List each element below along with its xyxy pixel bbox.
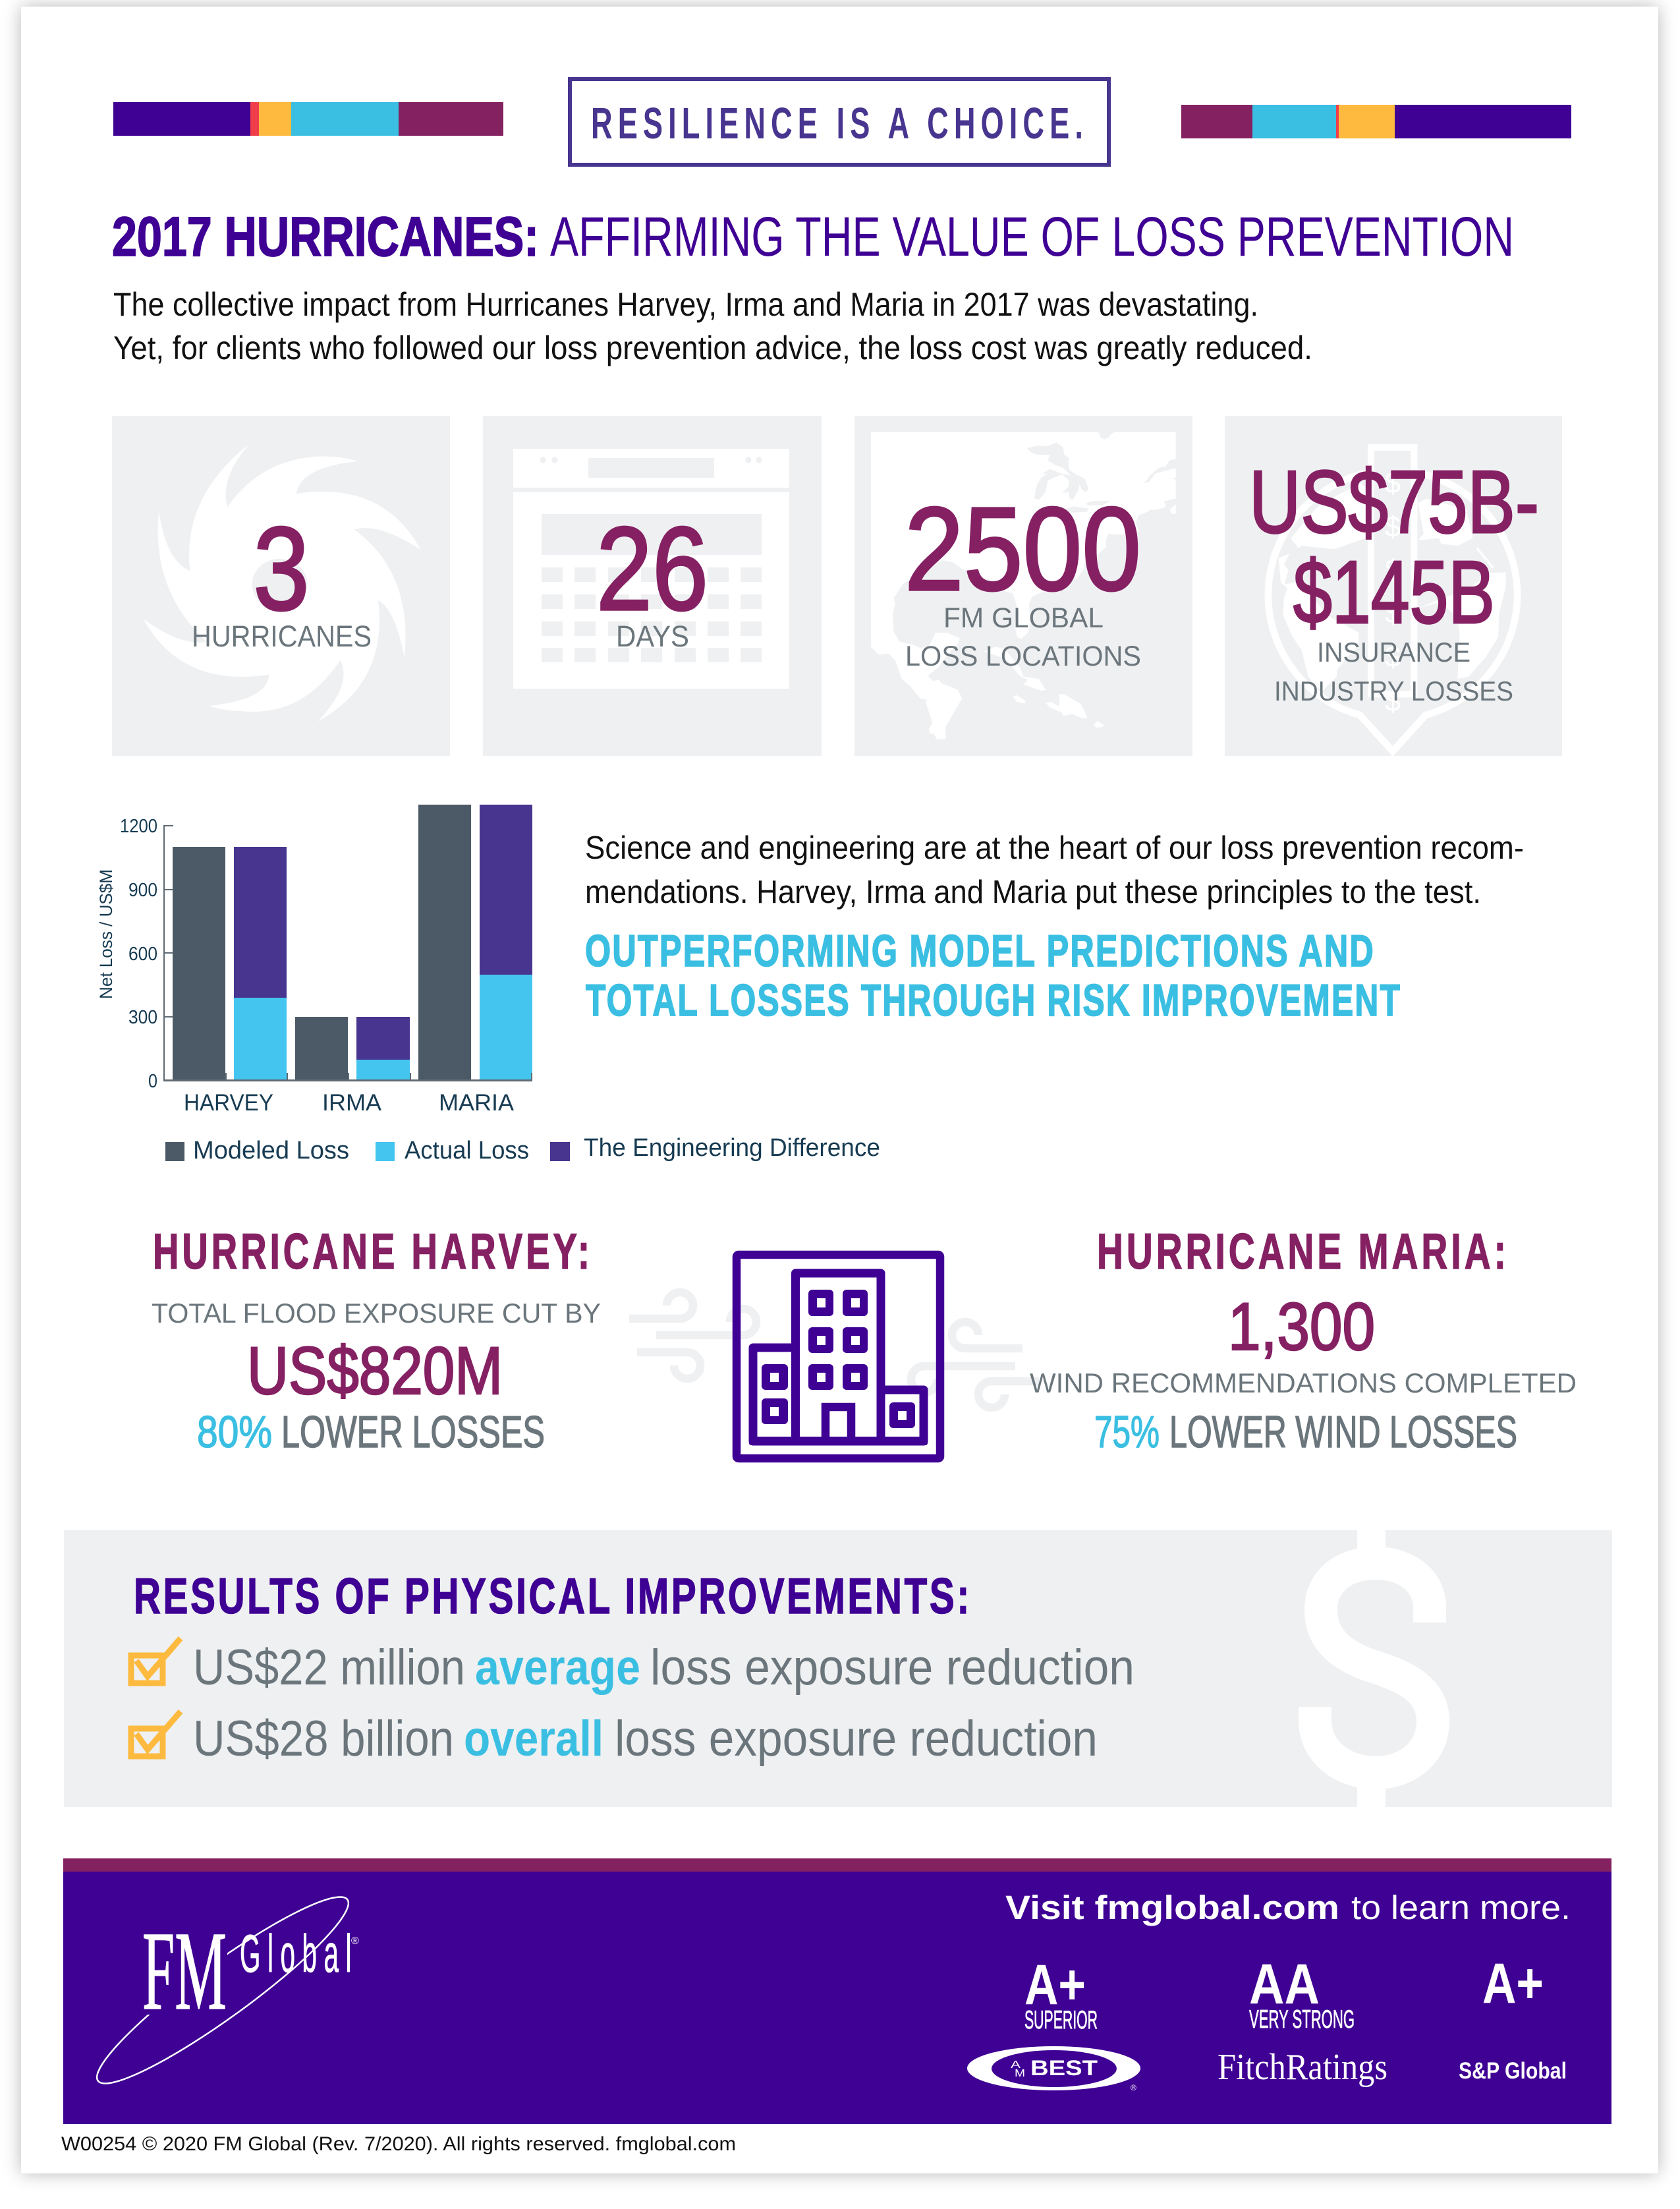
science text: Science and engineering are at the heart of our loss prevention recom- [585, 830, 1524, 866]
FM Global logo [82, 1878, 363, 2103]
y axis values: 300 [128, 1007, 157, 1028]
rating: Fitch: FitchRatings [1218, 2047, 1387, 2088]
icon: shield globe with dollars: $ [1385, 685, 1401, 717]
x axis labels: HARVEY [184, 1090, 273, 1116]
legend: Modeled Loss [193, 1137, 349, 1164]
website call to action: Visit fmglobal.com [1005, 1889, 1339, 1926]
label: days: DAYS [616, 619, 689, 653]
FM Global logo: ® [351, 1936, 359, 1947]
result line 2: US$28 billion [193, 1711, 454, 1767]
hurricane Harvey block: 80% [197, 1407, 272, 1457]
rating: Fitch: AA [1249, 1953, 1320, 2016]
hurricane Harvey block: TOTAL FLOOD EXPOSURE CUT BY [152, 1298, 601, 1329]
panel: results of physical improvements [64, 1530, 1612, 1807]
result line 2: loss exposure reduction [615, 1711, 1098, 1767]
number: 2500: 2500 [905, 483, 1141, 616]
rating: AM Best: ® [1131, 2083, 1136, 2092]
subheading [585, 926, 1401, 1025]
science text: mendations. Harvey, Irma and Maria put these principles to the test. [585, 875, 1481, 910]
icon: shield globe with dollars [1268, 447, 1517, 751]
subheading: TOTAL LOSSES THROUGH RISK IMPROVEMENT [586, 975, 1401, 1025]
icon: wind gusts [629, 1292, 1039, 1408]
legend: Actual Loss [405, 1137, 529, 1164]
icon: calendar [513, 449, 789, 689]
rating: AM Best [967, 1953, 1140, 2092]
number: 26: 26 [596, 503, 708, 635]
hurricane Harvey block [152, 1224, 601, 1457]
y axis values: 600 [128, 944, 157, 965]
legend [165, 1134, 880, 1164]
intro text [113, 286, 1312, 366]
subheading: OUTPERFORMING MODEL PREDICTIONS AND [585, 926, 1375, 976]
panel: insurance industry losses [1225, 416, 1562, 756]
legend: The Engineering Difference [584, 1134, 880, 1162]
label: FM Global loss locations: FM GLOBAL [943, 602, 1104, 634]
number: 3: 3 [253, 503, 310, 635]
panel: 2500 loss locations [854, 416, 1192, 756]
icon: checkbox 1 [131, 1638, 181, 1683]
icon: dollar watermark [1315, 1530, 1433, 1807]
title [112, 206, 1514, 268]
tagline box: RESILIENCE IS A CHOICE. [591, 99, 1088, 148]
label: FM Global loss locations: LOSS LOCATIONS [905, 641, 1141, 672]
icon: shield globe with dollars: $ [1385, 467, 1401, 499]
panel: 3 hurricanes [112, 416, 450, 756]
rating: AM Best: A+ [1024, 1953, 1086, 2017]
y axis title: Net Loss / US$M [96, 869, 116, 999]
x axis labels: MARIA [439, 1090, 515, 1116]
axes [163, 825, 532, 1081]
label: insurance industry losses: INSURANCE [1317, 637, 1470, 668]
icon: shield globe with dollars: $ [1385, 598, 1401, 629]
icon: hurricane swirl [144, 444, 420, 722]
hurricane Harvey block: HURRICANE HARVEY: [153, 1224, 593, 1280]
y axis values [120, 816, 157, 1092]
rating: Fitch: VERY STRONG [1249, 2005, 1355, 2034]
bars: Irma [295, 1017, 410, 1079]
y axis values: 1200 [120, 816, 157, 837]
rating: S&P: S&P Global [1459, 2058, 1567, 2084]
x axis labels: IRMA [322, 1090, 382, 1116]
rating: AM Best: A [1011, 2059, 1021, 2071]
bar chart [96, 805, 880, 1164]
FM Global logo: FM [142, 1908, 227, 2033]
rating: S&P: A+ [1482, 1952, 1544, 2015]
intro text: The collective impact from Hurricanes Harvey, Irma and Maria in 2017 was devastating. [113, 286, 1258, 323]
result line 2 [193, 1711, 1098, 1767]
left colour bar [113, 102, 503, 136]
label: FM Global loss locations [905, 602, 1141, 672]
result line 1: loss exposure reduction [650, 1640, 1134, 1696]
rating: AM Best: M [1015, 2068, 1025, 2079]
panel: 26 days [483, 416, 822, 756]
icon: building [737, 1255, 940, 1458]
tagline box [570, 79, 1109, 165]
hurricane Maria block: 75% [1094, 1407, 1160, 1457]
rating: S&P [1459, 1952, 1567, 2084]
y axis values: 900 [128, 880, 157, 901]
website call to action [1005, 1889, 1571, 1926]
heading: RESULTS OF PHYSICAL IMPROVEMENTS: [134, 1568, 972, 1624]
hurricane Maria block: WIND RECOMMENDATIONS COMPLETED [1030, 1367, 1577, 1398]
icon: shield globe with dollars: $ [1385, 511, 1401, 543]
rating: AM Best: BEST [1030, 2056, 1098, 2080]
hurricane Maria block: HURRICANE MARIA: [1097, 1224, 1509, 1280]
icon: shield globe with dollars: $ [1385, 642, 1401, 674]
label: insurance industry losses [1274, 637, 1513, 706]
result line 2: overall [464, 1711, 603, 1767]
x axis labels [184, 1090, 515, 1116]
result line 1: US$22 million [193, 1640, 465, 1696]
hurricane Harvey block: US$820M [247, 1333, 503, 1408]
icon: shield globe with dollars: $ [1385, 554, 1401, 586]
title: 2017 HURRICANES: [112, 206, 539, 268]
label: insurance industry losses: INDUSTRY LOSSES [1274, 675, 1513, 706]
icon: checkbox 2 [131, 1711, 181, 1756]
hurricane Maria block: 1,300 [1228, 1289, 1375, 1364]
website call to action: to learn more. [1351, 1889, 1571, 1926]
hurricane Maria block [1030, 1224, 1577, 1457]
y axis values: 0 [148, 1071, 157, 1092]
bars: Harvey [173, 847, 287, 1079]
hurricane Maria block: LOWER WIND LOSSES [1169, 1407, 1517, 1457]
result line 1: average [475, 1640, 640, 1696]
copyright footnote: W00254 © 2020 FM Global (Rev. 7/2020). All rights reserved. fmglobal.com [61, 2133, 736, 2155]
rating: Fitch [1218, 1953, 1387, 2088]
rating: AM Best: SUPERIOR [1024, 2006, 1098, 2034]
right colour bar [1181, 105, 1571, 138]
number: US$75B-$145B [1249, 452, 1539, 642]
hurricane Harvey block: LOWER LOSSES [281, 1407, 545, 1457]
label: hurricanes: HURRICANES [192, 619, 372, 653]
intro text: Yet, for clients who followed our loss prevention advice, the loss cost was greatly reduced. [113, 330, 1312, 366]
number: US$75B-$145B: US$75B- [1249, 452, 1539, 552]
result line 1 [193, 1640, 1134, 1696]
FM Global logo: Global [240, 1924, 358, 1984]
icon: map of North America [871, 432, 1176, 739]
number: US$75B-$145B: $145B [1293, 542, 1495, 642]
footer band [63, 1858, 1611, 2124]
science text [585, 830, 1524, 910]
bars: Maria [418, 805, 532, 1079]
